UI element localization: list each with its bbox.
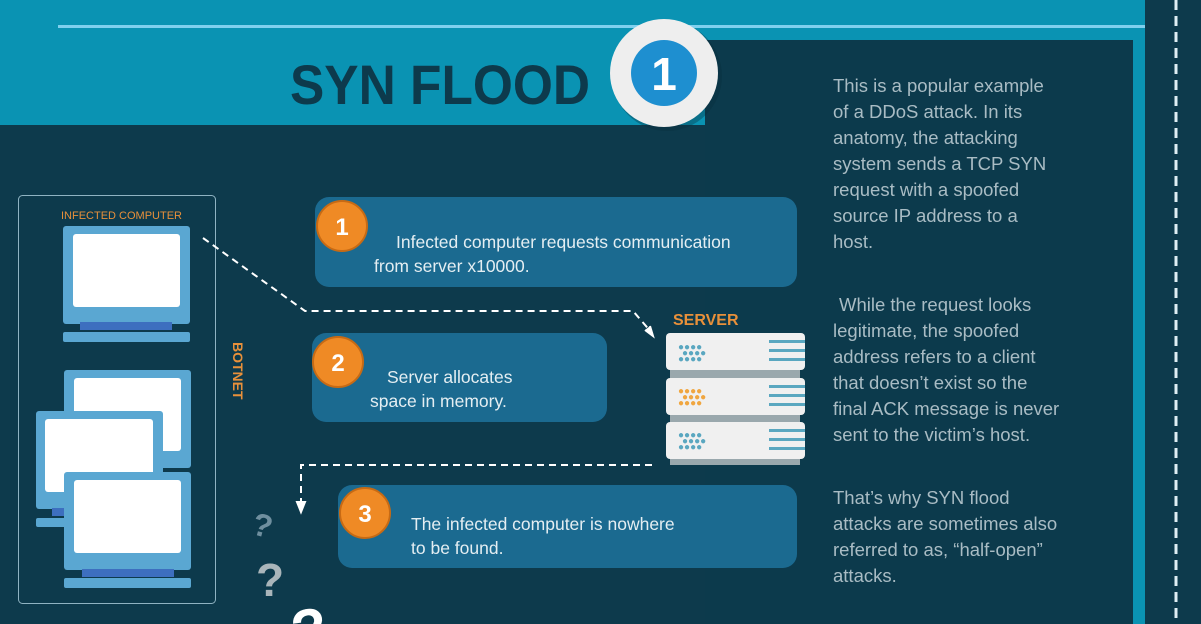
description text: sent to the victim’s host.: [833, 424, 1030, 445]
label: infected computer: INFECTED COMPUTER: [61, 210, 182, 222]
icon: question marks: ?: [256, 554, 284, 606]
arrow: server back to computer: [297, 465, 652, 512]
icon: server: ●●●●: [678, 442, 702, 453]
icon: number badge: [610, 19, 722, 131]
step 3 box: to be found.: [411, 538, 503, 558]
step 2 box: [312, 333, 607, 422]
icon: server: ●●●●: [682, 392, 706, 403]
description text: While the request looks: [839, 294, 1031, 315]
icon: question marks: [248, 505, 333, 624]
icon: server: ●●●●: [678, 342, 702, 353]
step 2 box: 2: [331, 350, 345, 377]
icon: server: ●●●●: [682, 348, 706, 359]
step 1 box: [315, 197, 797, 287]
description text: legitimate, the spoofed: [833, 320, 1019, 341]
icon: server: ●●●●: [678, 354, 702, 365]
icon: server: [666, 312, 805, 465]
arrow: computer to server: [203, 238, 653, 336]
description text: This is a popular example: [833, 75, 1044, 96]
description text: address refers to a client: [833, 346, 1036, 367]
icon: server: ●●●●: [678, 398, 702, 409]
step 3 box: The infected computer is nowhere: [411, 514, 675, 534]
icon: question marks: ?: [248, 505, 277, 545]
icon: number badge: 1: [651, 48, 677, 100]
step 1 box: Infected computer requests communication: [396, 232, 731, 252]
description text: final ACK message is never: [833, 398, 1059, 419]
step 3 box: [338, 485, 797, 568]
description text: attacks.: [833, 565, 897, 586]
icon: infected computer: [63, 226, 190, 342]
description text: referred to as, “half-open”: [833, 539, 1043, 560]
description text: source IP address to a: [833, 205, 1018, 226]
description text: attacks are sometimes also: [833, 513, 1057, 534]
right dashed divider: [1174, 0, 1178, 624]
description text: that doesn’t exist so the: [833, 372, 1027, 393]
description text: That’s why SYN flood: [833, 487, 1010, 508]
description text: of a DDoS attack. In its: [833, 101, 1022, 122]
icon: server: ●●●●: [682, 436, 706, 447]
step 2 box: Server allocates: [387, 367, 513, 387]
step 1 box: from server x10000.: [374, 256, 530, 276]
icon: botnet computers: [36, 370, 191, 588]
icon: server: SERVER: [673, 312, 739, 329]
right dark panel: [705, 40, 1133, 624]
step 3 box: 3: [358, 501, 372, 528]
step 2 box: space in memory.: [370, 391, 507, 411]
description text: request with a spoofed: [833, 179, 1019, 200]
description text: system sends a TCP SYN: [833, 153, 1046, 174]
label: botnet: BOTNET: [230, 342, 246, 400]
icon: server: ●●●●: [678, 430, 702, 441]
description text: [833, 75, 1059, 586]
icon: server: ●●●●: [678, 386, 702, 397]
panel: botnet: [18, 196, 216, 604]
description text: anatomy, the attacking: [833, 127, 1018, 148]
step 1 box: 1: [335, 214, 349, 241]
title: SYN FLOOD: [290, 53, 590, 116]
description text: host.: [833, 231, 873, 252]
